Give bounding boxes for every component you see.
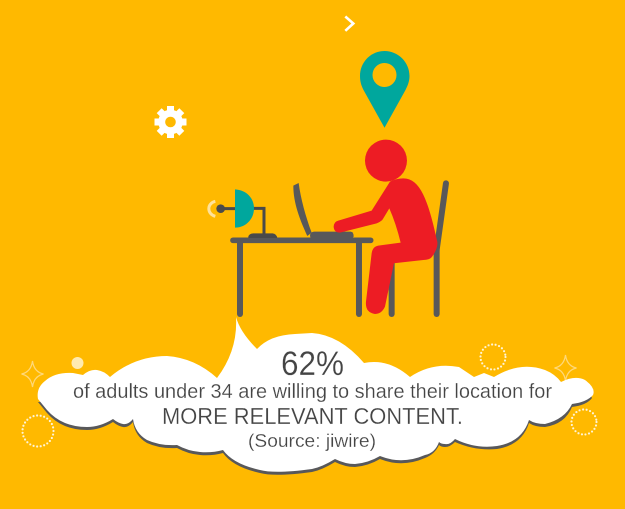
statistic text [73, 345, 552, 451]
icon: gear [154, 106, 186, 138]
description line: of adults under 34 are willing to share their location for [73, 381, 552, 403]
sparkle left [22, 361, 44, 387]
source line: (Source: jiwire) [248, 431, 376, 451]
cloud shadow [38, 380, 592, 475]
chair [392, 183, 446, 314]
desk [233, 240, 371, 314]
dotted ring top right [480, 344, 506, 370]
emphasis line: MORE RELEVANT CONTENT. [162, 403, 463, 429]
icon: location pin [360, 51, 410, 128]
dotted ring left [22, 416, 54, 446]
speech cloud [38, 317, 594, 475]
decorative accents [22, 344, 596, 446]
satellite dish [209, 189, 277, 238]
dot [72, 357, 84, 369]
desk scene [209, 140, 446, 314]
cloud body [38, 317, 594, 472]
dotted ring lower right [572, 410, 596, 434]
sparkle right [554, 355, 576, 381]
person [334, 140, 437, 314]
laptop [293, 183, 354, 240]
stat number: 62% [281, 345, 344, 383]
icon: chevron arrow [345, 16, 353, 31]
